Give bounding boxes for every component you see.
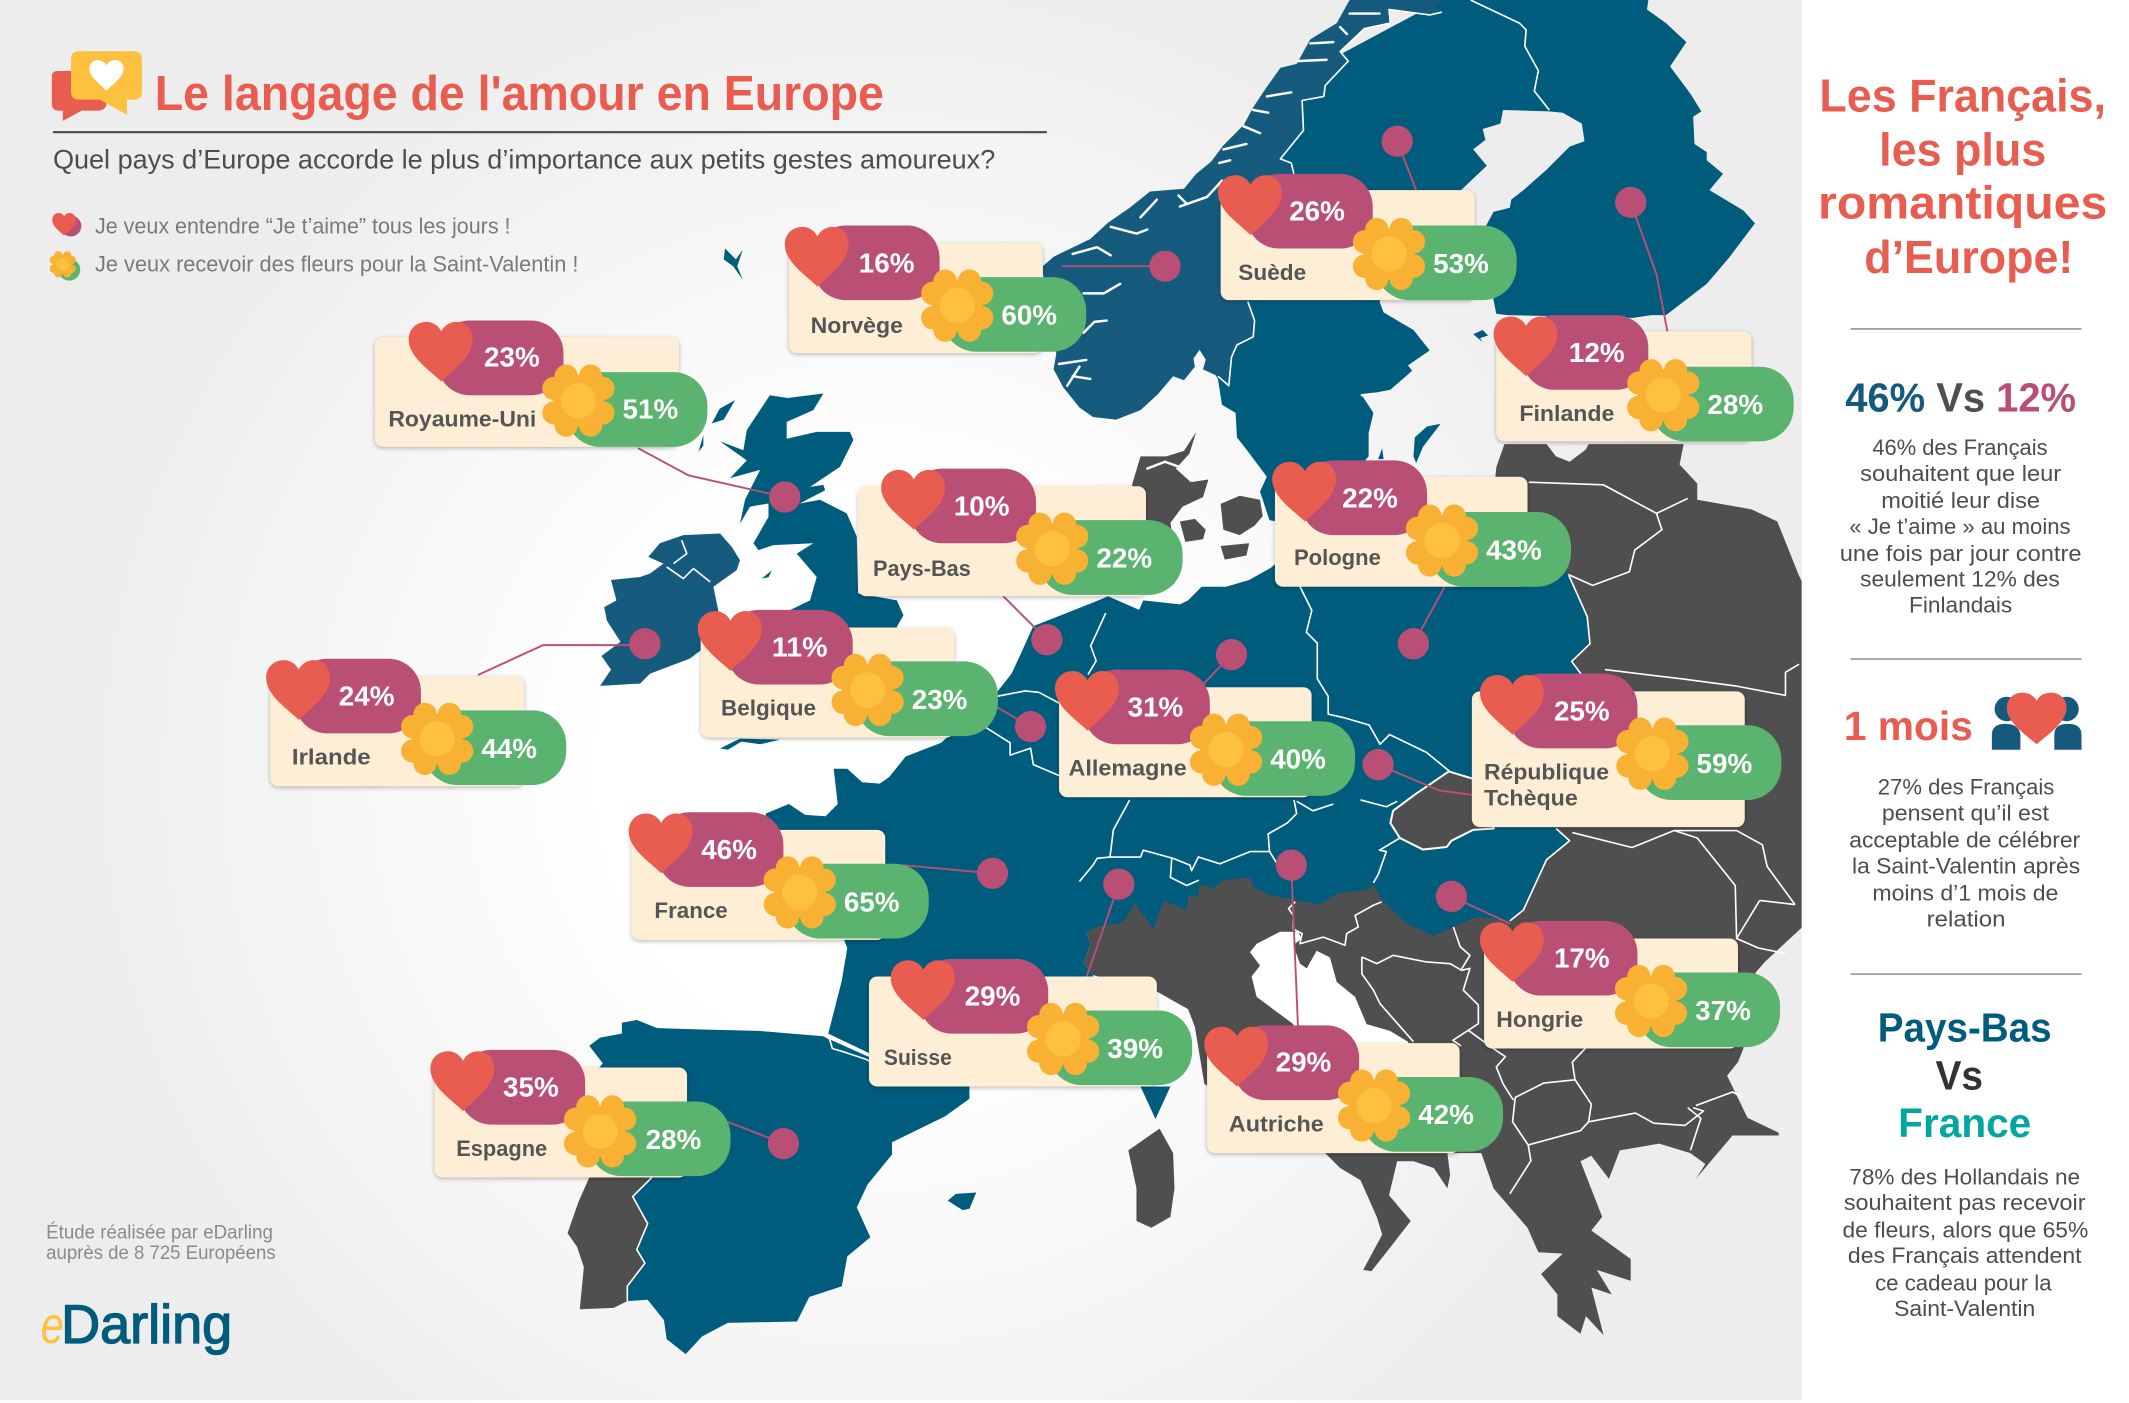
heart stat 31%: 31% [1128,691,1184,722]
card background [1275,477,1528,587]
paragraph: 46% [1840,435,2081,618]
heart stat 23% [409,321,563,395]
pin: Allemagne [1202,639,1247,686]
heart stat 24%: 24% [339,681,395,712]
icon: couple with heart [1992,693,2081,750]
paragraph: Pays-Bas vs France: ce cadeau pour la [1875,1270,2052,1295]
map: fjords and borders [1059,14,1380,469]
icon: flower legend [50,251,80,281]
heart stat 16% [785,225,940,300]
heart stat 25% [1480,674,1637,748]
paragraph: 46%: « Je t’aime » au moins [1849,514,2071,539]
flower stat 28%: 28% [646,1124,702,1155]
card background [1496,331,1752,441]
heart stat 46%: 46% [701,834,757,865]
heart stat 10%: 10% [954,490,1010,521]
flower stat 59%: 59% [1697,748,1752,779]
paragraph: 46%: moitié leur dise [1881,488,2040,513]
heart stat 29% [891,959,1048,1034]
heart stat 12%: 12% [1569,337,1625,368]
side heading [1818,69,2107,283]
flower stat 23% [832,654,998,736]
flower stat 44%: 44% [481,733,537,764]
flower stat 59% [1616,718,1781,800]
flower stat 53%: 53% [1433,248,1489,279]
country card: Finlande [1494,315,1794,441]
footnote [46,1221,276,1264]
country card: Belgique [698,610,998,737]
card background [789,243,1043,353]
country name: France [654,898,728,923]
map: Faroe islands [724,249,743,280]
country card: Suisse [869,959,1192,1087]
flower stat 42%: 42% [1418,1099,1474,1130]
side heading: Les Français, [1819,69,2106,121]
pin: Finlande [1615,187,1667,331]
map: Adriatic sea [1250,932,1419,1087]
country card: France [629,812,929,940]
heart stat 12% [1494,315,1648,390]
card background [375,337,679,447]
heart stat 46% [629,812,783,887]
title: Le langage de l'amour en Europe [155,67,884,121]
paragraph: 1 mois: la Saint-Valentin après [1852,853,2080,878]
pin: Hongrie [1436,881,1510,924]
country card: Allemagne [1055,670,1355,797]
flower stat 28% [1627,359,1794,441]
paragraph: 46%: Finlandais [1909,593,2012,618]
subtitle: Quel pays d’Europe accorde le plus d’importance aux petits gestes amoureux? [53,143,995,174]
stat: 46% Vs 12%: 46% Vs 12% [1845,375,2076,421]
flower stat 22% [1016,513,1183,595]
flower stat 60%: 60% [1001,300,1057,331]
flower stat 37% [1615,965,1780,1047]
pin: Suisse [1086,869,1134,978]
paragraph: 1 mois: moins d’1 mois de [1872,880,2058,905]
heart stat 17%: 17% [1554,943,1610,974]
flower stat 65%: 65% [844,886,900,917]
country name: Autriche [1229,1111,1324,1136]
card background [1472,691,1745,827]
country name: Belgique [721,696,816,721]
flower stat 43%: 43% [1486,535,1542,566]
flower stat 28%: 28% [1707,389,1763,420]
country card: Norvège [785,225,1086,353]
paragraph: Pays-Bas vs France: souhaitent pas recevoir [1844,1190,2086,1215]
paragraph: Pays-Bas vs France: des Français attendent [1848,1243,2082,1268]
card background [1221,190,1475,300]
heart stat 24% [266,659,421,733]
stat: Pays-Bas Vs France [1878,1005,2052,1146]
country card: Royaume-Uni [375,321,707,447]
country card: Irlande [266,659,566,786]
footnote: auprès de 8 725 Européens [46,1242,276,1264]
heart stat 26% [1218,174,1373,249]
country card: Pologne [1272,460,1571,587]
pin: Belgique [995,706,1046,742]
paragraph: Pays-Bas vs France: Saint-Valentin [1894,1296,2035,1321]
card background [434,1068,687,1178]
pin: République Tchèque [1363,749,1480,796]
country name: Norvège [811,313,903,338]
pin: Norvège [1062,251,1181,282]
card background [270,676,524,786]
paragraph: 1 mois: relation [1927,906,2005,931]
country name: Pays-Bas [873,556,971,581]
paragraph: 46%: seulement 12% des [1860,567,2060,592]
card background [1207,1043,1460,1153]
pin: Espagne [728,1122,799,1159]
map of Europe [568,0,1802,1354]
legend text: heart: Je veux entendre “Je t’aime” tous les jours ! [95,214,511,239]
country name: Allemagne [1069,756,1187,781]
paragraph: 46%: souhaitent que leur [1860,461,2062,486]
stat: 1 mois: 1 mois [1844,703,1973,749]
heart stat 11%: 11% [772,632,828,663]
card background [869,977,1157,1087]
country card: Suède [1218,174,1517,300]
flower stat 39% [1027,1003,1192,1085]
map: surveyed countries in blue [589,0,1755,1354]
card background [701,627,955,737]
country name: Finlande [1519,401,1614,426]
map: Norway and Ireland [600,0,1442,686]
flower stat 44% [401,703,566,785]
country name: République [1484,760,1609,785]
heart stat 11% [698,610,853,685]
legend text: flower: Je veux recevoir des fleurs pour la Saint-Valentin ! [95,252,578,277]
heart stat 22% [1272,460,1427,535]
heart stat 25%: 25% [1554,696,1610,727]
card background [631,830,885,940]
side panel [1802,0,2129,1403]
flower stat 37%: 37% [1695,995,1751,1026]
stat: Pays-Bas Vs France: France [1898,1100,2031,1146]
paragraph: Pays-Bas vs France: 78% des Hollandais ne [1849,1164,2080,1189]
pin: Pays-Bas [1002,595,1062,655]
flower stat 40% [1190,714,1355,796]
country name: Irlande [292,745,371,770]
flower stat 39%: 39% [1107,1033,1163,1064]
pin: Irlande [478,628,661,675]
paragraph: 1 mois: pensent qu’il est [1882,800,2050,825]
country name: Suède [1238,260,1306,285]
flower stat 53% [1353,218,1517,300]
country name: Hongrie [1496,1007,1583,1032]
pin: Suède [1382,126,1416,190]
heart stat 26%: 26% [1289,196,1345,227]
card background [1059,687,1312,797]
card background [1484,939,1738,1049]
map: grey Czech area [1390,771,1494,850]
heart stat 22%: 22% [1342,482,1398,513]
flower stat 60% [921,269,1086,352]
heart stat 10% [881,469,1036,543]
paragraph: 1 mois: 27% des Français [1878,775,2054,800]
paragraph: 46%: une fois par jour contre [1840,541,2081,566]
country name: Royaume-Uni [388,406,536,431]
stat: Pays-Bas Vs France: Vs [1936,1052,1983,1098]
flower stat 51% [542,365,707,447]
pin: Royaume-Uni [638,448,800,513]
side heading: romantiques [1818,177,2107,229]
country card: Hongrie [1480,921,1780,1049]
icon: heart legend [52,213,81,236]
country name: Suisse [884,1045,952,1070]
country name: Tchèque [1484,785,1578,810]
paragraph: Pays-Bas vs France [1843,1164,2088,1321]
footnote: Étude réalisée par eDarling [46,1221,273,1244]
icon: speech bubbles with heart [52,51,142,121]
logo: eDarling: Darling [61,1294,232,1355]
flower stat 51%: 51% [623,393,678,424]
pin: Pologne [1398,587,1445,659]
country name: Espagne [456,1136,547,1161]
paragraph: 1 mois [1849,775,2081,931]
heart stat 35% [430,1050,585,1125]
heart stat 35%: 35% [503,1072,559,1103]
heart stat 29% [1204,1025,1359,1100]
stat: Pays-Bas Vs France: Pays-Bas [1878,1005,2052,1051]
heart stat 29%: 29% [965,981,1021,1012]
country card: Autriche [1204,1025,1503,1153]
side heading: d’Europe! [1864,231,2073,283]
card background [858,486,1146,596]
heart stat 17% [1480,921,1637,996]
pin: France [903,858,1008,889]
heart stat 29%: 29% [1276,1047,1332,1078]
map: non-surveyed countries in grey [568,432,1802,1335]
paragraph: Pays-Bas vs France: de fleurs, alors que 65% [1843,1217,2088,1242]
heart stat 16%: 16% [859,247,915,278]
legend [50,213,578,281]
flower stat 65% [764,856,929,939]
pin: Autriche [1276,850,1307,1028]
heart stat 23%: 23% [484,342,540,373]
flower stat 43% [1406,504,1571,587]
paragraph: 1 mois: acceptable de célébrer [1849,828,2081,853]
side heading: les plus [1879,124,2046,176]
country card: République Tchèque [1472,674,1781,827]
country card: Espagne [430,1050,730,1178]
heart stat 31% [1055,670,1210,744]
flower stat 28% [564,1095,730,1176]
flower stat 22%: 22% [1096,543,1152,574]
paragraph: 46%: 46% des Français [1872,435,2048,460]
country name: Pologne [1294,545,1381,570]
flower stat 42% [1338,1069,1503,1152]
flower stat 23%: 23% [912,684,968,715]
flower stat 40%: 40% [1270,744,1326,775]
country card: Pays-Bas [858,469,1183,596]
logo: eDarling: e [41,1296,64,1354]
